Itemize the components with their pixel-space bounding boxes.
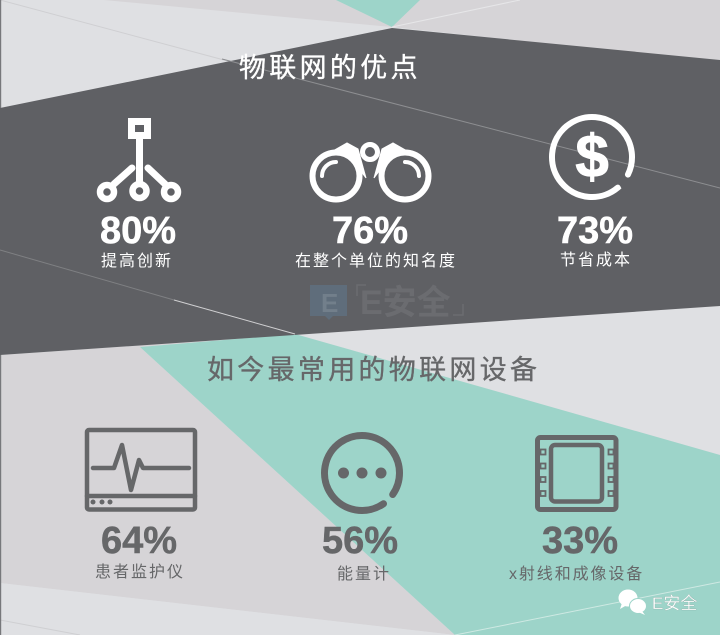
watermark: E安全 bbox=[310, 284, 463, 322]
stat: 56%: 56% bbox=[322, 520, 398, 562]
watermark: E安全: E安全 bbox=[360, 284, 451, 322]
stat: 64%: 64% bbox=[101, 520, 177, 562]
icon: meter with dots bbox=[310, 421, 414, 525]
panel: dark advantages band bbox=[0, 28, 720, 355]
watermark: WeChat E安全 bbox=[618, 590, 697, 615]
icon: WeChat bubbles bbox=[618, 590, 646, 615]
icon: patient monitor bbox=[87, 430, 195, 510]
label: 在整个单位的知名度: 在整个单位的知名度 bbox=[295, 252, 457, 270]
stat: 73%: 73% bbox=[557, 210, 633, 252]
label: 节省成本: 节省成本 bbox=[560, 251, 632, 269]
label: 患者监护仪: 患者监护仪 bbox=[95, 563, 185, 581]
icon: network tree bbox=[100, 122, 178, 199]
icon: imaging film bbox=[538, 438, 616, 510]
icon: dollar coin bbox=[536, 101, 648, 213]
label: E安全: E安全 bbox=[652, 594, 697, 613]
watermark: E安全: E bbox=[321, 288, 338, 318]
heading: 如今最常用的物联网设备: 如今最常用的物联网设备 bbox=[207, 355, 540, 385]
stat: 33%: 33% bbox=[542, 520, 618, 562]
stat: 80%: 80% bbox=[100, 210, 176, 252]
label: x射线和成像设备: x射线和成像设备 bbox=[509, 565, 644, 583]
stat: 76%: 76% bbox=[332, 210, 408, 252]
heading: 物联网的优点: 物联网的优点 bbox=[239, 53, 421, 83]
label: 提高创新: 提高创新 bbox=[101, 252, 173, 270]
icon: binoculars bbox=[312, 143, 428, 200]
icon: dollar coin: $ bbox=[575, 123, 609, 190]
label: 能量计: 能量计 bbox=[337, 565, 391, 583]
